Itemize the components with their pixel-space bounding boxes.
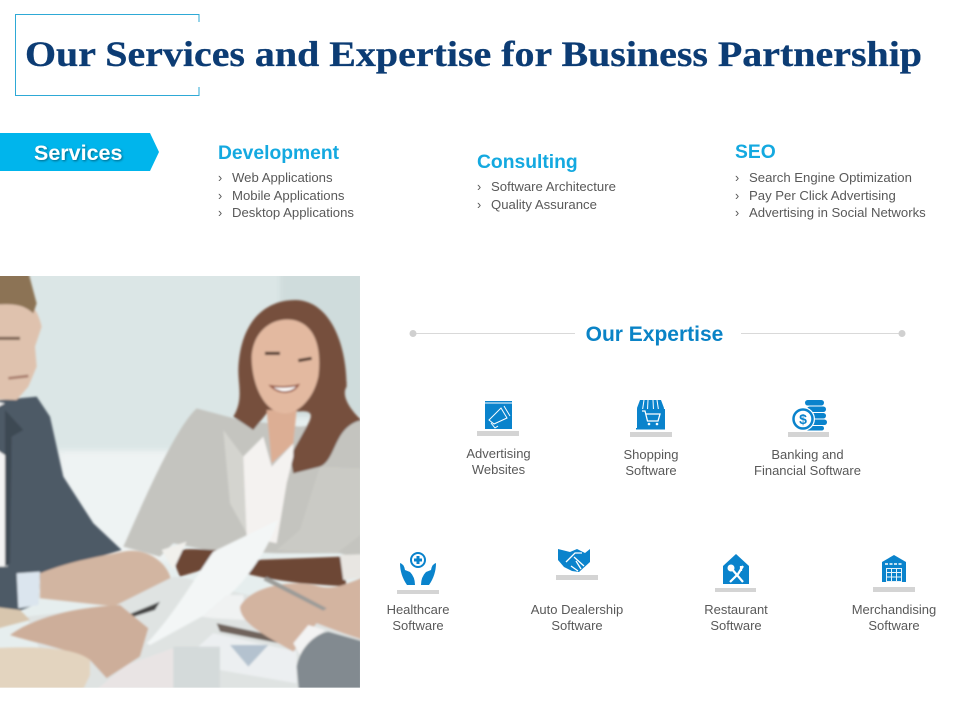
man's hands [17,572,40,608]
column: development: › [218,206,222,220]
icon: shopping software [630,400,672,437]
column: seo [735,142,926,220]
label: shopping software: Software [625,463,677,478]
label: shopping software: Shopping [624,447,678,462]
column: development: Web Applications [232,170,333,185]
icon: healthcare [397,553,439,594]
column: seo: SEO [735,142,776,163]
table [30,576,337,680]
column: seo: Advertising in Social Networks [749,205,926,220]
label: restaurant: Software [710,618,762,633]
icon: advertising websites [477,401,519,436]
woman's face [252,319,319,413]
column: development: Desktop Applications [232,205,354,220]
tablet and papers [148,535,270,645]
column: seo: Pay Per Click Advertising [749,188,896,203]
column: development: › [218,189,222,203]
expertise heading: Our Expertise [586,323,723,346]
label: banking and financial: Financial Software [754,463,861,478]
woman's neck [267,410,297,463]
column: development: Mobile Applications [232,188,345,203]
icon: handshake [556,549,598,580]
column: development: Development [218,143,340,164]
front-left hands and sleeve [0,606,30,629]
label: restaurant: Restaurant [704,602,768,617]
column: consulting: Consulting [477,152,578,173]
man's face [0,290,42,400]
column: seo: › [735,206,739,220]
woman's arm [170,549,347,587]
column: development: › [218,171,222,185]
icon: banking and financial: $ [799,411,807,427]
woman's jacket [123,408,393,570]
label: merchandising: Merchandising [852,602,936,617]
woman's hair [233,300,362,473]
icon: merchandising [873,555,915,592]
column: development [218,143,354,220]
title frame [16,14,199,96]
label: banking and financial: Banking and [771,447,844,462]
label: advertising websites: Advertising [466,446,531,461]
label: healthcare: Software [392,618,444,633]
label: auto dealership: Software [551,618,603,633]
title: Our Services and Expertise for Business Partnership [25,34,922,74]
column: seo: Search Engine Optimization [749,170,912,185]
label: advertising websites: Websites [472,462,526,477]
label: merchandising: Software [868,618,920,633]
icon: banking and financial [788,400,829,437]
label: auto dealership: Auto Dealership [531,602,623,617]
column: consulting [477,152,616,212]
services arrow banner: Services [34,141,123,165]
label: healthcare: Healthcare [387,602,449,617]
column: seo: › [735,171,739,185]
photo: business meeting [0,276,360,688]
icon: restaurant [715,554,756,592]
expertise heading [410,323,906,346]
column: consulting: › [477,180,481,194]
column: consulting: Quality Assurance [491,197,597,212]
column: consulting: Software Architecture [491,179,616,194]
man's suit [0,397,122,613]
column: seo: › [735,189,739,203]
services arrow banner [0,133,159,171]
column: consulting: › [477,198,481,212]
woman's blouse [243,437,293,543]
front-right hands and sleeve [239,578,360,652]
